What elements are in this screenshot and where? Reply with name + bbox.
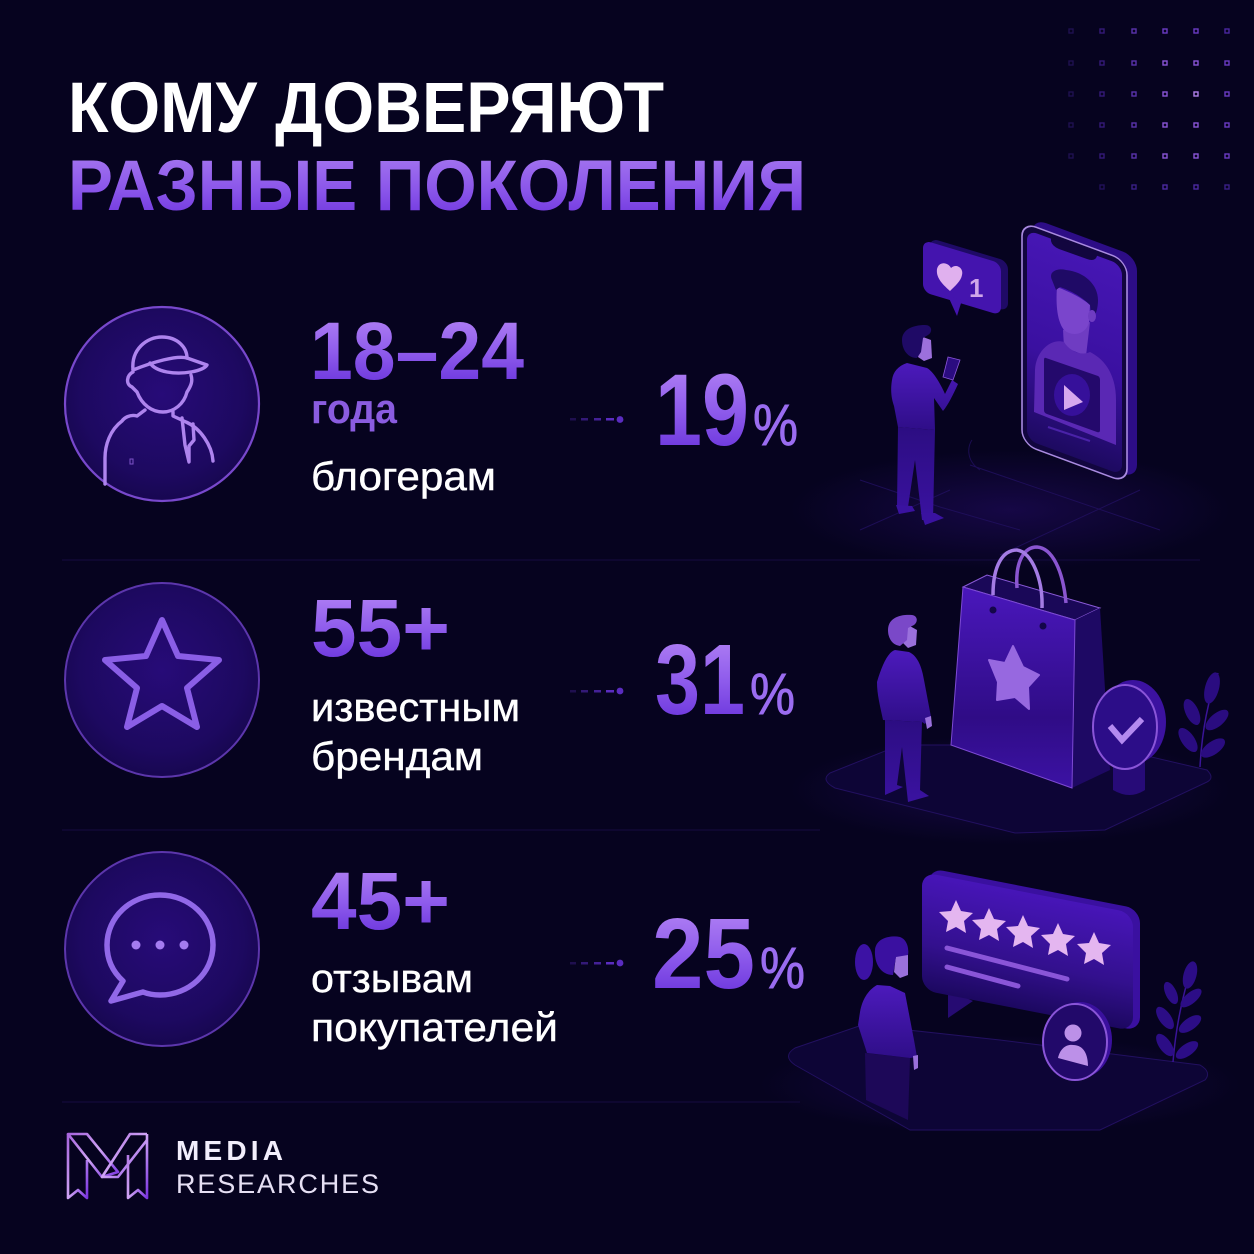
woman	[855, 936, 918, 1120]
value: 19%: 19	[655, 353, 749, 467]
platform	[788, 1025, 1208, 1130]
person with phone	[891, 325, 960, 525]
floor grid	[860, 440, 1160, 555]
value: 19%: %	[753, 393, 798, 458]
value: 25%: 25	[652, 898, 755, 1010]
arrow	[570, 416, 623, 423]
review bubble	[922, 868, 1140, 1031]
label: отзывам покупателей	[311, 957, 558, 1050]
row dividers	[62, 560, 1200, 1102]
heart notification	[923, 238, 1008, 316]
label: блогерам: блогерам	[311, 455, 496, 499]
shopping bag	[951, 547, 1110, 788]
label: известным брендам: известным	[311, 686, 520, 730]
age unit: года: года	[311, 385, 398, 432]
panel: 45+ row	[65, 852, 1208, 1130]
person	[877, 615, 932, 802]
illustration: person, shopping bag, badge	[826, 547, 1232, 833]
phone	[1022, 218, 1137, 483]
heart notification: 1	[969, 273, 983, 303]
background glow: row 3 floor	[760, 1035, 1240, 1135]
icon: young person in cap	[65, 307, 259, 501]
user coin	[1043, 1002, 1112, 1080]
plant	[1175, 671, 1232, 767]
age: 45+: 45+	[311, 856, 450, 947]
value: 31%: 31	[655, 624, 745, 736]
icon: chat bubble	[65, 852, 259, 1046]
label: отзывам покупателей: покупателей	[311, 1006, 558, 1050]
title line 1: КОМУ ДОВЕРЯЮТ	[68, 69, 664, 148]
label: известным брендам	[311, 686, 520, 779]
background glow: row 2 floor	[790, 735, 1230, 845]
logo mark: M	[68, 1134, 147, 1198]
icon: star	[65, 583, 259, 777]
illustration: woman, review bubble	[788, 868, 1208, 1130]
value: 25%: %	[760, 936, 805, 1001]
label: отзывам покупателей: отзывам	[311, 957, 473, 1001]
age: 55+: 55+	[311, 583, 450, 674]
arrow	[570, 688, 623, 694]
age: 18–24: 18–24	[310, 306, 524, 397]
value: 31%: %	[750, 662, 795, 727]
panel: 18–24 row	[65, 218, 1160, 555]
logo text: RESEARCHES: RESEARCHES	[176, 1169, 379, 1199]
background glow: row 1 floor	[790, 450, 1230, 570]
plant	[1153, 960, 1204, 1062]
badge with check	[1093, 680, 1166, 795]
platform	[826, 745, 1211, 833]
arrow	[570, 960, 623, 966]
logo	[68, 1134, 379, 1199]
title	[68, 69, 806, 226]
title line 2: РАЗНЫЕ ПОКОЛЕНИЯ	[68, 147, 806, 226]
dotted grid decoration	[1069, 29, 1229, 189]
illustration: person and phone with blogger	[860, 218, 1160, 555]
label: известным брендам: брендам	[311, 735, 483, 779]
logo text: MEDIA: MEDIA	[176, 1135, 283, 1166]
panel: 55+ row	[65, 547, 1232, 833]
